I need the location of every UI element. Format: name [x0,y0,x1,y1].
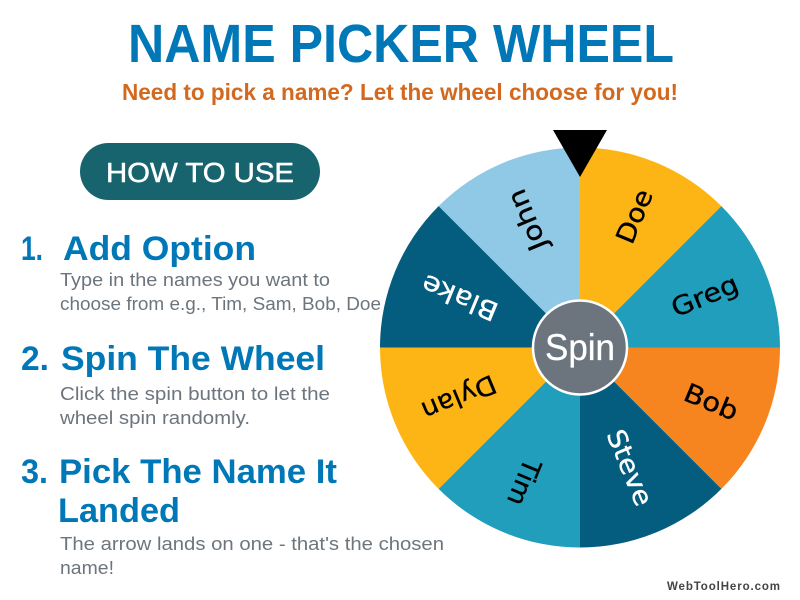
step 3 [21,453,444,578]
step 3: name! [60,558,114,578]
segment: Tim [439,348,580,548]
step 2 [21,340,330,428]
step 2: Click the spin button to let the [60,384,330,404]
label: Bob: Bob [679,378,742,427]
spin button [533,300,627,394]
label: Dylan: Dylan [417,368,500,425]
step 1: choose from e.g., Tim, Sam, Bob, Doe [60,294,381,314]
segment: Dylan [380,348,580,489]
label: Greg: Greg [667,270,743,324]
label: Blake: Blake [418,268,503,326]
title: NAME PICKER WHEEL [128,14,674,74]
label: John: John [502,184,555,257]
segment: Greg [580,206,780,348]
step 3: The arrow lands on one - that's the chosen [60,534,444,554]
segment: Steve [580,348,721,548]
name wheel [380,148,780,548]
step 1 [21,230,381,314]
how to use badge: HOW TO USE [106,157,294,188]
segment: Bob [580,348,780,489]
step 1: 1. [21,230,43,268]
spin button: Spin [545,327,615,368]
label: Tim: Tim [500,453,547,510]
segment: Blake [380,206,580,348]
label: Doe: Doe [611,185,660,248]
step 3: 3. [21,453,48,491]
step 1: Add Option [63,230,256,268]
step 3: Pick The Name It [59,453,337,491]
segment: John [439,148,580,348]
pointer arrow [553,130,607,177]
step 2: 2. [21,340,49,378]
subtitle: Need to pick a name? Let the wheel choose for you! [122,79,678,105]
watermark: WebToolHero.com [667,581,780,593]
label: Steve: Steve [600,425,658,511]
step 3: Landed [58,492,180,530]
step 2: Spin The Wheel [61,340,325,378]
segment: Doe [580,148,721,348]
step 1: Type in the names you want to [60,270,330,290]
how to use badge [80,143,320,200]
step 2: wheel spin randomly. [59,408,250,428]
